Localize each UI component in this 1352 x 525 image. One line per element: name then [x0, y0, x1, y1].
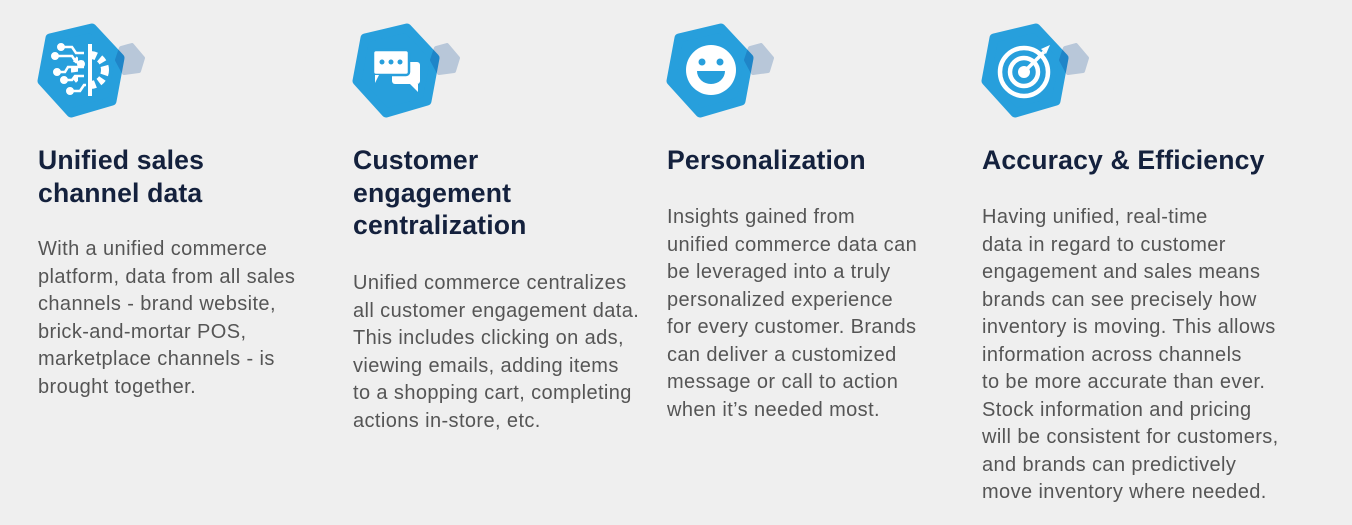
- body text: viewing emails, adding items: [353, 354, 619, 376]
- body text: and brands can predictively: [982, 454, 1236, 476]
- body text: Stock information and pricing: [982, 398, 1252, 420]
- column: customer engagement: [352, 24, 639, 432]
- body text: be leveraged into a truly: [667, 261, 890, 283]
- body text: With a unified commerce: [38, 238, 267, 260]
- body text: [353, 272, 639, 432]
- body text: Unified commerce centralizes: [353, 272, 627, 294]
- body text: Having unified, real-time: [982, 206, 1208, 228]
- body text: actions in-store, etc.: [353, 410, 541, 432]
- body text: message or call to action: [667, 371, 898, 393]
- body text: [38, 238, 295, 398]
- title: Customer: [353, 145, 478, 175]
- body text: [982, 206, 1279, 503]
- body text: engagement and sales means: [982, 261, 1260, 283]
- column: accuracy: [982, 24, 1279, 503]
- title: [353, 145, 527, 240]
- icon: gear circuit: [38, 24, 145, 118]
- body text: will be consistent for customers,: [982, 426, 1279, 448]
- body text: information across channels: [982, 344, 1242, 366]
- body text: Insights gained from: [667, 206, 855, 228]
- title: Accuracy & Efficiency: [982, 145, 1265, 175]
- body text: all customer engagement data.: [353, 300, 639, 322]
- body text: unified commerce data can: [667, 234, 917, 256]
- body text: brick-and-mortar POS,: [38, 320, 246, 342]
- title: [38, 145, 204, 208]
- icon: smiley: [666, 24, 774, 118]
- title: channel data: [38, 178, 202, 208]
- body text: [667, 206, 917, 420]
- body text: channels - brand website,: [38, 293, 276, 315]
- body text: inventory is moving. This allows: [982, 316, 1276, 338]
- body text: brought together.: [38, 376, 196, 398]
- body text: for every customer. Brands: [667, 316, 916, 338]
- title: Unified sales: [38, 145, 204, 175]
- body text: to be more accurate than ever.: [982, 371, 1265, 393]
- icon: target: [982, 24, 1089, 118]
- body text: personalized experience: [667, 288, 893, 310]
- body text: marketplace channels - is: [38, 348, 275, 370]
- column: personalization: [666, 24, 917, 420]
- body text: brands can see precisely how: [982, 288, 1257, 310]
- body text: This includes clicking on ads,: [353, 327, 624, 349]
- body text: can deliver a customized: [667, 344, 897, 366]
- body text: move inventory where needed.: [982, 481, 1267, 503]
- body text: to a shopping cart, completing: [353, 382, 632, 404]
- body text: data in regard to customer: [982, 234, 1226, 256]
- title: engagement: [353, 178, 511, 208]
- title: Personalization: [667, 145, 866, 175]
- body text: platform, data from all sales: [38, 266, 295, 288]
- title: centralization: [353, 210, 527, 240]
- column: unified sales channel data: [38, 24, 295, 398]
- icon: chat bubbles: [352, 24, 460, 118]
- body text: when it’s needed most.: [667, 398, 880, 420]
